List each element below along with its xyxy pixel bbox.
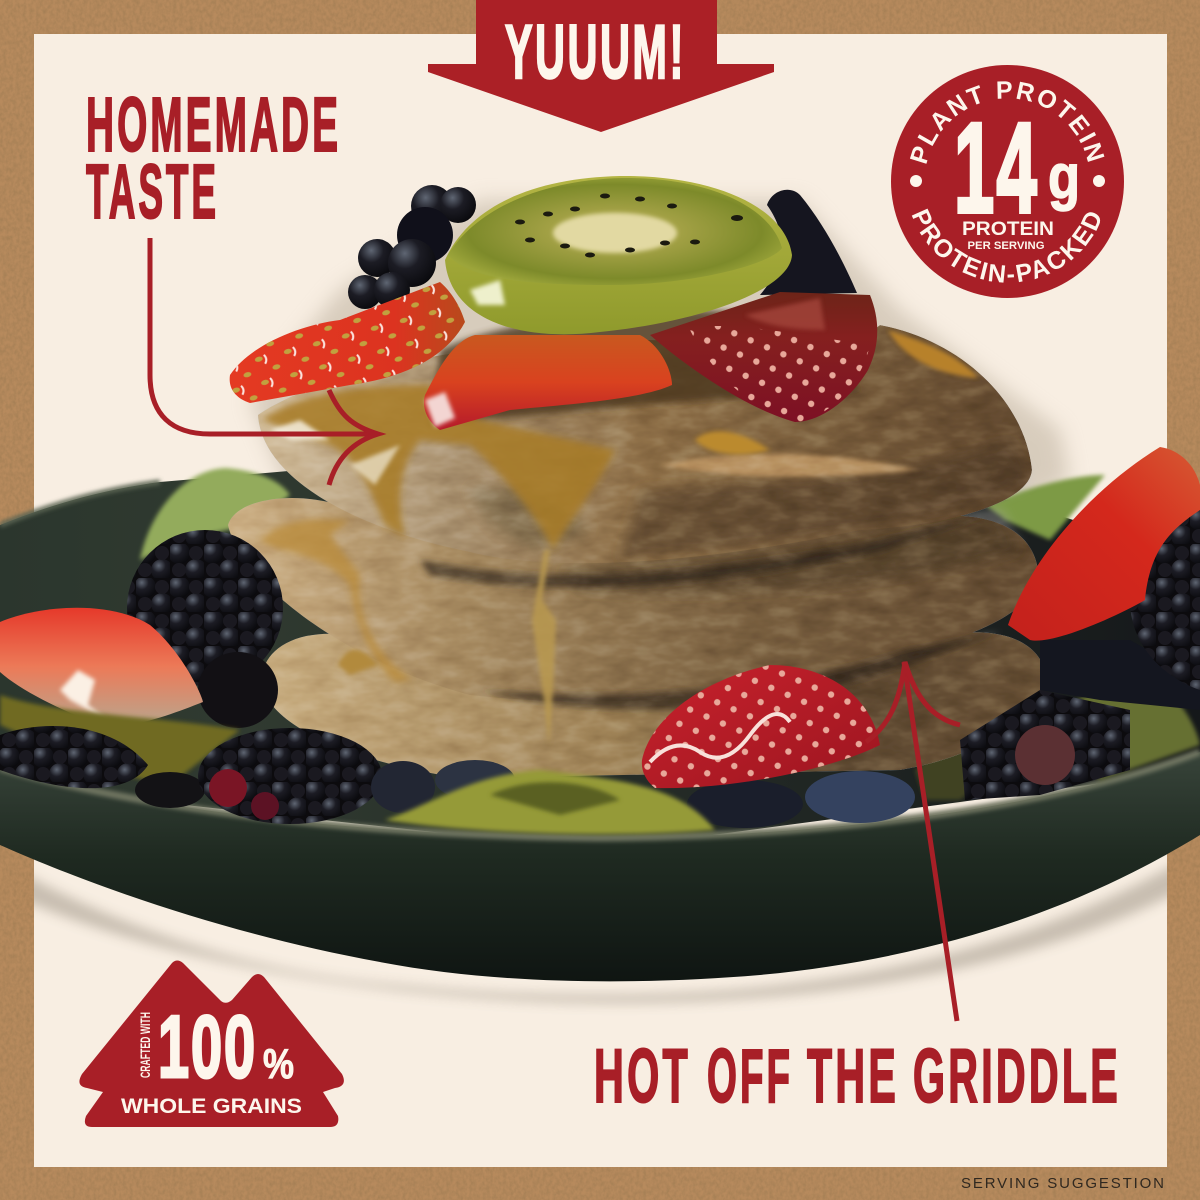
middle pancake	[228, 498, 1038, 702]
plate body	[0, 752, 1200, 981]
plate shadow	[0, 850, 1200, 1003]
left blackberry	[127, 530, 283, 686]
badge: 100% whole grains: 100	[158, 997, 257, 1096]
heading: hot off the griddle: OFF	[707, 1034, 793, 1119]
blueberries front	[371, 761, 435, 813]
back kiwi left	[140, 468, 290, 560]
badge: 14g protein: 14	[954, 97, 1039, 240]
kiwi right lower	[1040, 672, 1200, 780]
badge: 14g protein: PLANT PROTEIN	[910, 81, 1104, 164]
back kiwi right	[985, 475, 1105, 540]
pancake stack	[228, 325, 1045, 778]
photo: pancake stack on plate	[0, 176, 1200, 1003]
shadow under fruit	[430, 310, 860, 425]
arrow: hot off the griddle	[866, 662, 960, 1021]
badge: 100% whole grains: WHOLE GRAINS	[121, 1095, 302, 1118]
strawberry top left	[230, 282, 465, 403]
heading: homemade taste: HOMEMADE	[86, 82, 341, 168]
plate inner	[0, 470, 1200, 850]
badge: 14g protein: PROTEIN	[962, 219, 1054, 240]
left lower blackberries	[0, 726, 148, 788]
badge: 14g protein: PROTEIN-PACKED	[912, 208, 1100, 283]
heading: hot off the griddle: HOT	[594, 1034, 691, 1119]
strawberry bottom	[642, 665, 880, 788]
heading: homemade taste	[86, 82, 341, 235]
right strawberry	[1008, 447, 1200, 641]
left strawberry	[0, 608, 203, 726]
heading: hot off the griddle	[594, 1034, 1121, 1119]
footnote: serving suggestion: SERVING SUGGESTION	[961, 1175, 1164, 1192]
food shadow on panel	[250, 200, 1070, 520]
badge: 100% whole grains: CRAFTED WITH	[137, 1012, 153, 1078]
blackberry top right	[760, 190, 857, 295]
badge: 100% whole grains: %	[263, 1040, 294, 1087]
badge: 14g protein: PER SERVING	[968, 240, 1044, 252]
badge: 14g protein: g	[1048, 143, 1080, 212]
heading: hot off the griddle: THE	[807, 1034, 899, 1119]
heading: homemade taste: TASTE	[86, 149, 219, 235]
bottom pancake	[262, 632, 1045, 778]
right berries	[960, 690, 1130, 800]
badge: 100% whole grains	[79, 960, 344, 1127]
badge: 14g protein	[891, 65, 1124, 298]
blackberries top	[348, 185, 476, 309]
syrup	[260, 330, 978, 745]
banner: YUUUM!	[428, 0, 774, 132]
strawberry top right	[650, 292, 877, 422]
arrow: homemade taste	[150, 238, 378, 485]
top pancake	[258, 325, 1032, 563]
banner: YUUUM!: YUUUM!	[505, 10, 686, 95]
kiwi slice top	[445, 176, 792, 334]
strawberry top center	[424, 335, 672, 430]
left lower kiwi and syrup	[0, 695, 240, 785]
kiwi front	[385, 770, 715, 834]
